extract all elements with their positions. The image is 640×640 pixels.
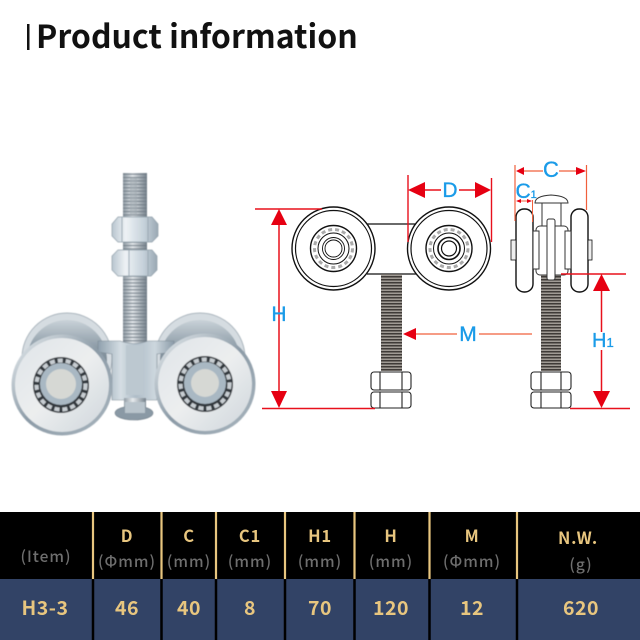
- column headers: (mm): [228, 550, 272, 572]
- row values: 8: [244, 592, 256, 621]
- row values: 70: [308, 592, 332, 621]
- table header background: [0, 512, 640, 579]
- row values: 12: [460, 592, 484, 621]
- threaded rod drawing: [381, 274, 402, 371]
- column headers: (Φmm): [98, 550, 156, 572]
- dimension C1: [516, 180, 537, 222]
- column headers: C1: [239, 523, 261, 547]
- column separators: [93, 512, 517, 640]
- column headers: D: [121, 523, 133, 547]
- row values: 120: [373, 592, 409, 621]
- row values: 40: [177, 592, 201, 621]
- dimension D: [408, 175, 492, 242]
- pin and hub: [533, 195, 571, 280]
- column headers: N.W.: [558, 525, 598, 549]
- dimension C: [515, 157, 586, 221]
- left wheel drawing: [292, 207, 375, 290]
- row values: 46: [115, 592, 139, 621]
- column headers: [20, 523, 598, 575]
- column headers: (Φmm): [443, 550, 501, 572]
- row values: [22, 592, 599, 621]
- column headers: C: [183, 523, 195, 547]
- right front wheel: [154, 334, 256, 434]
- dimension M: [403, 323, 532, 346]
- threaded bolt: [123, 173, 147, 343]
- nuts side: [531, 372, 571, 408]
- column headers: H: [384, 523, 398, 547]
- dimension M: M: [459, 323, 477, 346]
- product photo: roller hanger: [12, 173, 256, 436]
- threaded rod side: [541, 274, 561, 371]
- column headers: (g): [569, 553, 593, 575]
- title: Product information: [36, 12, 358, 58]
- technical drawing: side view: [511, 195, 592, 408]
- column headers: M: [465, 523, 479, 547]
- column headers: (mm): [167, 550, 211, 572]
- right wheel drawing: [408, 207, 490, 290]
- dimension H: H: [271, 303, 287, 326]
- column headers: (mm): [298, 550, 342, 572]
- nuts drawing: [371, 372, 411, 408]
- bracket outline: [367, 224, 416, 274]
- lower nut: [112, 250, 157, 276]
- upper nut: [112, 217, 158, 242]
- column headers: (Item): [20, 545, 72, 567]
- dimension D: D: [442, 179, 458, 202]
- specification table: [0, 512, 640, 640]
- table row background: [0, 579, 640, 640]
- technical drawing: front view: [292, 207, 490, 408]
- dimension C: C: [543, 157, 559, 182]
- row values: 620: [563, 592, 599, 621]
- column headers: (mm): [369, 550, 413, 572]
- dimension H1: [561, 274, 630, 408]
- left front wheel: [12, 334, 112, 436]
- dimension H: [255, 209, 375, 408]
- bracket: [98, 341, 174, 420]
- back wheels: [22, 313, 245, 403]
- row values: H3-3: [22, 592, 68, 621]
- wheels side: [511, 209, 592, 292]
- dimension C1: C1: [516, 180, 537, 203]
- dimension H1: H1: [592, 330, 614, 352]
- column headers: H1: [308, 523, 332, 547]
